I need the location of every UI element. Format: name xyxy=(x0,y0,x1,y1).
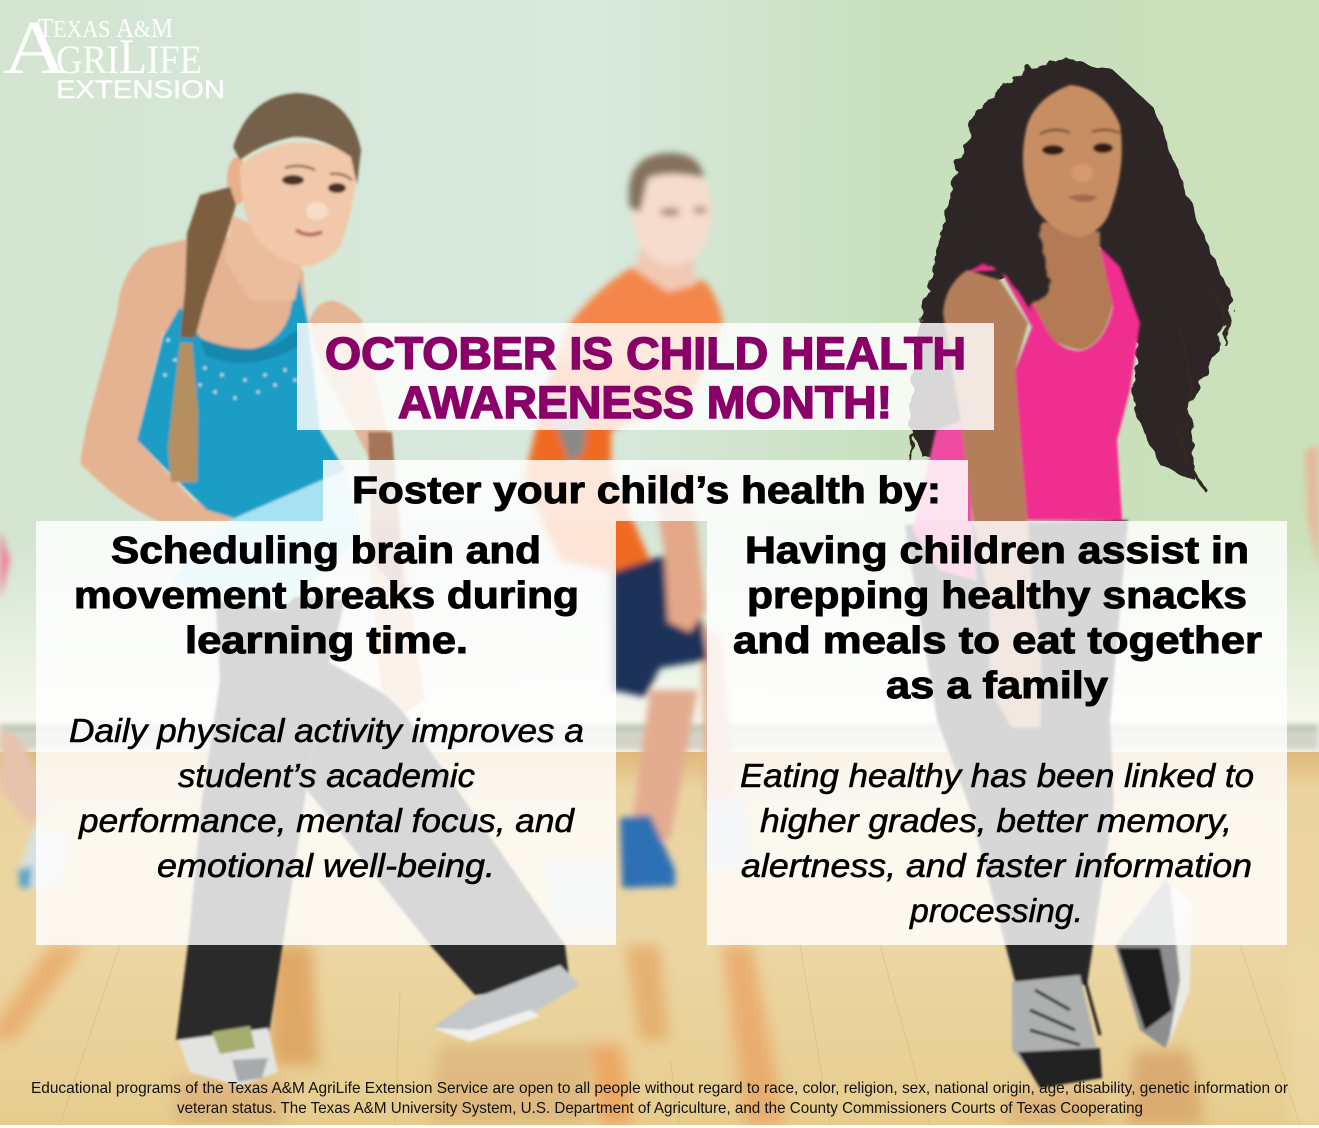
right body text: higher grades, better memory, xyxy=(760,802,1232,839)
left heading: Scheduling brain and xyxy=(111,530,541,572)
left body text xyxy=(69,712,584,884)
left body text: student’s academic xyxy=(178,757,476,794)
hair mass xyxy=(908,58,1233,480)
logo: Texas A&M AgriLife Extension: EXTENSION xyxy=(56,76,225,104)
near arm xyxy=(943,270,1041,727)
pink top side behind arm xyxy=(913,420,976,580)
near leg xyxy=(176,590,345,1040)
title panel xyxy=(297,323,994,430)
panel: brain and movement breaks xyxy=(36,521,616,945)
far leg xyxy=(307,660,570,995)
logo: Texas A&M AgriLife Extension: GRILIFE xyxy=(56,28,202,84)
face details xyxy=(1042,145,1064,155)
far shoe xyxy=(1115,880,1192,1048)
pink top xyxy=(967,247,1140,520)
left heading xyxy=(74,530,579,662)
neck and chest xyxy=(1013,222,1113,350)
logo: Texas A&M AgriLife Extension: A xyxy=(3,6,67,90)
right heading: prepping healthy snacks xyxy=(747,575,1247,617)
left heading: learning time. xyxy=(185,620,468,662)
shoulder, near arm and chest xyxy=(80,237,308,522)
braid xyxy=(180,187,236,338)
far arm xyxy=(308,301,425,713)
title: OCTOBER IS CHILD HEALTH xyxy=(325,328,966,379)
right heading: as a family xyxy=(886,665,1108,707)
subtitle panel xyxy=(323,460,968,521)
curly strands xyxy=(905,290,1228,490)
left body text: Daily physical activity improves a xyxy=(69,712,584,749)
title: AWARENESS MONTH! xyxy=(398,377,892,428)
hair xyxy=(233,93,361,185)
subtitle: Foster your child’s health by: xyxy=(352,470,941,512)
left girl xyxy=(80,93,580,1086)
face details xyxy=(282,175,304,185)
wood floor xyxy=(0,752,1319,1125)
shoes xyxy=(178,1028,278,1086)
neck and face xyxy=(225,215,305,300)
left edge figure fragments xyxy=(0,445,1319,888)
footer disclaimer: Educational programs of the Texas A&M AgriLife Extension Service are open to all people without regard to race, color, religion, sex, national origin, age, disability, genetic information or xyxy=(31,1080,1289,1097)
right body text: processing. xyxy=(909,892,1083,929)
blue top xyxy=(137,273,360,540)
right body text xyxy=(740,757,1254,929)
hair over shoulder xyxy=(975,215,1050,310)
near shoe xyxy=(1012,975,1102,1085)
right heading: and meals to eat together xyxy=(733,620,1262,662)
right heading: Having children assist in xyxy=(745,530,1249,572)
right body text: Eating healthy has been linked to xyxy=(740,757,1254,794)
logo: Texas A&M AgriLife Extension xyxy=(3,6,225,104)
boy head xyxy=(635,240,695,292)
left body text: performance, mental focus, and xyxy=(78,802,576,839)
boy shirt xyxy=(524,267,723,572)
footer disclaimer xyxy=(31,1080,1289,1117)
right girl xyxy=(905,58,1233,1088)
panel: healthy snacks and meals xyxy=(707,521,1287,945)
boy arm xyxy=(650,470,706,632)
gym wall xyxy=(0,0,1319,770)
boy in background xyxy=(524,153,752,930)
title xyxy=(325,328,966,428)
boy shoes xyxy=(620,815,675,888)
legs xyxy=(905,520,1128,985)
bottom white edge xyxy=(0,1125,1319,1128)
footer disclaimer: veteran status. The Texas A&M University System, U.S. Department of Agriculture, and the County Commissioners Courts of Texas Cooperating xyxy=(177,1100,1143,1117)
sparkles on top xyxy=(164,338,296,400)
right heading xyxy=(733,530,1262,707)
logo: Texas A&M AgriLife Extension: TEXAS A&M xyxy=(38,13,173,43)
left body text: emotional well-being. xyxy=(157,847,495,884)
boy shorts xyxy=(612,550,708,697)
face xyxy=(1023,85,1122,237)
boy legs xyxy=(630,690,698,840)
right body text: alertness, and faster information xyxy=(741,847,1252,884)
left heading: movement breaks during xyxy=(74,575,579,617)
